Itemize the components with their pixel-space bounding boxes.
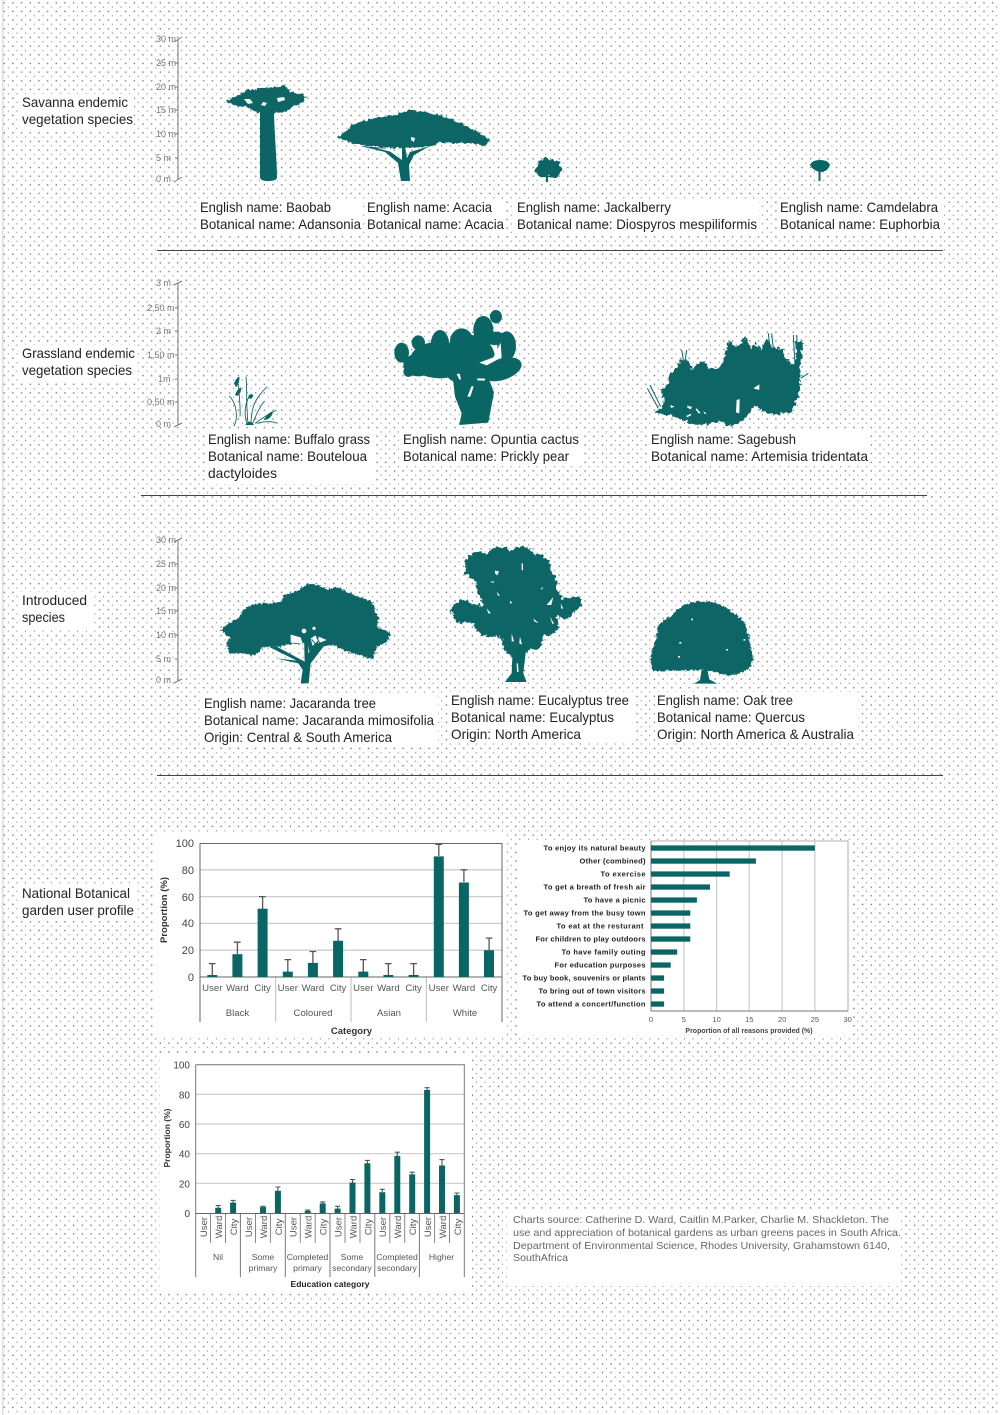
caption: buffalo grass: English name: Buffalo grass xyxy=(208,431,370,447)
icon: opuntia cactus xyxy=(394,310,525,425)
bar chart: education category: Ward xyxy=(304,1216,314,1238)
icon: buffalo grass xyxy=(229,377,277,426)
bar chart: education category: Ward xyxy=(214,1216,225,1238)
section label: vegetation species xyxy=(22,362,132,378)
bar chart: reasons for visiting: To get away from the busy town xyxy=(524,908,646,918)
bar chart: reasons for visiting: Proportion of all reasons provided (%) xyxy=(685,1028,813,1035)
bar chart: population category: 80 xyxy=(182,865,194,877)
bar chart: education category: Higher xyxy=(429,1252,454,1262)
height scale: 5 m xyxy=(156,654,171,664)
section: savanna endemic vegetation xyxy=(20,34,942,234)
height scale: 20 m xyxy=(156,583,176,593)
caption: sagebush xyxy=(649,431,870,466)
bar chart: education category: City xyxy=(408,1219,419,1235)
bar chart: reasons for visiting xyxy=(518,841,853,1035)
bar chart: population category: Proportion (%) xyxy=(159,877,170,943)
bar chart: reasons for visiting: To have family outing xyxy=(562,948,646,956)
height scale: 25 m xyxy=(156,58,176,68)
height scale: 0 m xyxy=(156,419,171,429)
section label: vegetation species xyxy=(22,111,133,127)
bar chart: education category: City xyxy=(364,1219,374,1235)
section label xyxy=(20,345,136,381)
bar chart: reasons for visiting: To eat at the resturant xyxy=(556,922,644,930)
bar chart: education category: User xyxy=(378,1216,389,1237)
section label: Introduced xyxy=(22,592,87,608)
bar chart: population category: City xyxy=(405,983,422,994)
height scale: 1,50 m xyxy=(147,350,175,360)
bar chart: reasons for visiting: To buy book, souvenirs or plants xyxy=(522,974,646,982)
caption: eucalyptus: Botanical name: Eucalyptus xyxy=(451,709,614,725)
height scale: 0 m xyxy=(156,675,171,685)
icon: sagebush xyxy=(647,333,808,427)
bar chart: education category: City xyxy=(274,1219,285,1235)
caption: jackalberry xyxy=(515,199,759,234)
bar chart: reasons for visiting: 10 xyxy=(712,1015,721,1024)
height scale xyxy=(156,34,182,184)
caption: jacaranda: Origin: Central & South America xyxy=(204,729,392,745)
caption: jacaranda xyxy=(202,695,438,747)
bar chart: education category: Ward xyxy=(393,1216,404,1238)
bar chart: education category: Completed xyxy=(287,1252,328,1262)
bar chart: population category: User xyxy=(202,983,223,994)
bar chart: population category: Coloured xyxy=(294,1008,332,1019)
bar chart: education category: Some xyxy=(252,1252,274,1262)
height scale: 15 m xyxy=(156,606,176,616)
bar chart: education category: User xyxy=(244,1216,255,1237)
caption: buffalo grass: dactyloides xyxy=(208,465,277,481)
bar chart: education category: User xyxy=(423,1216,434,1237)
bar chart: education category: secondary xyxy=(332,1263,373,1273)
bar chart: population category: User xyxy=(353,983,374,994)
bar chart: education category: Nil xyxy=(213,1252,223,1262)
caption: opuntia cactus: English name: Opuntia cactus xyxy=(403,431,579,447)
bar chart: reasons for visiting: To enjoy its natural beauty xyxy=(544,844,646,852)
icon: eucalyptus xyxy=(452,547,582,682)
height scale: 10 m xyxy=(156,630,176,640)
caption: baobab: Botanical name: Adansonia xyxy=(200,216,361,232)
bar chart: population category: Ward xyxy=(226,983,249,994)
section label: Grassland endemic xyxy=(22,345,135,361)
height scale: 0 m xyxy=(156,174,171,184)
bar chart: population category: 60 xyxy=(182,892,194,904)
caption: jacaranda: English name: Jacaranda tree xyxy=(204,695,376,711)
bar chart: population category: City xyxy=(330,983,347,994)
bar chart: education category: 0 xyxy=(184,1209,190,1220)
bar chart: education category: 60 xyxy=(179,1120,190,1131)
bar chart: reasons for visiting: To get a breath of fresh air xyxy=(544,882,646,892)
bar chart: population category: White xyxy=(453,1008,477,1019)
bar chart: population category: Category xyxy=(331,1026,373,1037)
height scale: 15 m xyxy=(156,105,176,115)
height scale: 2,50 m xyxy=(147,303,175,313)
height scale xyxy=(147,278,182,429)
bar chart: population category: Black xyxy=(226,1008,249,1019)
height scale xyxy=(156,535,182,685)
icon: jacaranda xyxy=(221,583,391,683)
text block: charts source: use and appreciation of botanical gardens as urban greens paces in South Africa. xyxy=(513,1227,901,1239)
bar chart: education category: User xyxy=(334,1216,344,1237)
icon: jackalberry xyxy=(534,158,562,182)
text block: charts source: SouthAfrica xyxy=(513,1252,568,1264)
text block: charts source xyxy=(507,1211,901,1286)
section label: national botanical garden user profile xyxy=(20,885,136,921)
icon: oak xyxy=(651,602,753,684)
caption: eucalyptus: English name: Eucalyptus tree xyxy=(451,692,629,708)
bar chart: population category: 100 xyxy=(176,838,194,850)
bar chart: reasons for visiting: To bring out of town visitors xyxy=(538,986,646,996)
bar chart: education category: Ward xyxy=(348,1216,360,1238)
section label: species xyxy=(22,609,65,625)
caption: camdelabra xyxy=(778,199,942,234)
caption: oak: Botanical name: Quercus xyxy=(657,709,805,725)
bar chart: population category: Ward xyxy=(453,983,475,994)
bar chart: reasons for visiting: For education purposes xyxy=(554,960,646,970)
bar chart: reasons for visiting: 25 xyxy=(811,1015,819,1024)
text block: charts source: Charts source: Catherine D. Ward, Caitlin M.Parker, Charlie M. Shackleton. The xyxy=(513,1214,889,1226)
icon: candelabra euphorbia xyxy=(810,160,830,181)
height scale: 20 m xyxy=(156,82,176,92)
section label: national botanical garden user profile: National Botanical xyxy=(22,885,130,901)
caption: buffalo grass xyxy=(206,431,376,484)
caption: oak xyxy=(655,692,858,742)
bar chart: education category: primary xyxy=(293,1263,323,1273)
caption: buffalo grass: Botanical name: Bouteloua xyxy=(208,448,367,464)
bar chart: population category: User xyxy=(278,983,299,994)
icon: baobab xyxy=(225,86,306,181)
caption: jacaranda: Botanical name: Jacaranda mimosifolia xyxy=(204,712,434,728)
caption: jackalberry: English name: Jackalberry xyxy=(517,199,671,215)
section: grassland endemic vegetation xyxy=(20,278,870,484)
bar chart: education category: Education category xyxy=(291,1279,370,1289)
height scale: 0,50 m xyxy=(147,397,175,407)
bar chart: education category: Ward xyxy=(259,1216,270,1238)
bar chart: population category: 40 xyxy=(182,918,194,930)
bar chart: education category: secondary xyxy=(377,1263,418,1273)
section: introduced species xyxy=(20,535,858,747)
height scale: 2 m xyxy=(156,326,171,336)
height scale: 3 m xyxy=(156,278,171,288)
bar chart: reasons for visiting: To have a picnic xyxy=(584,896,646,904)
bar chart: education category: 20 xyxy=(179,1179,190,1190)
bar chart: population category: 0 xyxy=(188,972,194,984)
caption: opuntia cactus xyxy=(401,431,581,466)
bar chart: reasons for visiting: 20 xyxy=(778,1015,786,1024)
caption: acacia: Botanical name: Acacia xyxy=(367,216,504,232)
bar chart: reasons for visiting: To exercise xyxy=(600,870,646,878)
bar chart: population category xyxy=(155,834,507,1037)
section label xyxy=(20,94,134,130)
bar chart: reasons for visiting: 15 xyxy=(745,1015,753,1024)
section label: national botanical garden user profile: garden user profile xyxy=(22,902,134,918)
bar chart: reasons for visiting: 5 xyxy=(682,1015,686,1024)
caption: oak: Origin: North America & Australia xyxy=(657,726,854,742)
bar chart: population category: City xyxy=(254,983,271,994)
bar chart: education category: primary xyxy=(249,1263,278,1273)
caption: camdelabra: Botanical name: Euphorbia xyxy=(780,216,940,232)
caption: oak: English name: Oak tree xyxy=(657,692,793,708)
caption: opuntia cactus: Botanical name: Prickly pear xyxy=(403,448,569,464)
bar chart: education category: City xyxy=(229,1219,240,1235)
bar chart: education category: 40 xyxy=(179,1150,190,1161)
bar chart: education category: 100 xyxy=(173,1061,190,1072)
caption: eucalyptus: Origin: North America xyxy=(451,726,581,742)
bar chart: reasons for visiting: 30 xyxy=(844,1015,852,1024)
caption: eucalyptus xyxy=(449,692,633,742)
bar chart: education category xyxy=(160,1055,472,1292)
section label: Savanna endemic xyxy=(22,94,128,110)
bar chart: education category: Completed xyxy=(376,1252,418,1262)
bar chart: population category: 20 xyxy=(182,945,194,957)
caption: sagebush: English name: Sagebush xyxy=(651,431,796,447)
bar chart: education category: Some xyxy=(341,1252,363,1262)
bar chart: education category: Ward xyxy=(438,1216,449,1238)
bar chart: education category: City xyxy=(318,1219,330,1235)
bar chart: population category: City xyxy=(481,983,498,994)
bar chart: population category: Asian xyxy=(377,1008,401,1019)
caption: sagebush: Botanical name: Artemisia tridentata xyxy=(651,448,868,464)
bar chart: education category: Proportion (%) xyxy=(162,1108,172,1168)
height scale: 30 m xyxy=(156,535,176,545)
bar chart: education category: City xyxy=(453,1219,464,1235)
icon: acacia xyxy=(338,110,490,181)
caption: baobab xyxy=(198,199,363,234)
bar chart: reasons for visiting: For children to play outdoors xyxy=(536,934,646,944)
height scale: 25 m xyxy=(156,559,176,569)
height scale: 1m xyxy=(158,374,171,384)
text block: charts source: Department of Environmental Science, Rhodes University, Grahamstown 6140, xyxy=(513,1240,890,1252)
caption: baobab: English name: Baobab xyxy=(200,199,331,215)
height scale: 10 m xyxy=(156,129,176,139)
bar chart: population category: Ward xyxy=(302,983,324,994)
caption: jackalberry: Botanical name: Diospyros mespiliformis xyxy=(517,216,757,232)
bar chart: reasons for visiting: 0 xyxy=(649,1015,653,1024)
bar chart: reasons for visiting: Other (combined) xyxy=(580,856,646,866)
caption: acacia xyxy=(365,199,506,234)
bar chart: education category: User xyxy=(288,1216,300,1237)
bar chart: reasons for visiting: To attend a concert/function xyxy=(536,1000,646,1008)
bar chart: education category: 80 xyxy=(179,1090,190,1101)
height scale: 30 m xyxy=(156,34,176,44)
section label xyxy=(20,592,92,628)
bar chart: education category: User xyxy=(199,1216,210,1237)
bar chart: population category: User xyxy=(429,983,450,994)
caption: camdelabra: English name: Camdelabra xyxy=(780,199,938,215)
bar chart: population category: Ward xyxy=(377,983,400,994)
caption: acacia: English name: Acacia xyxy=(367,199,492,215)
height scale: 5 m xyxy=(156,153,171,163)
